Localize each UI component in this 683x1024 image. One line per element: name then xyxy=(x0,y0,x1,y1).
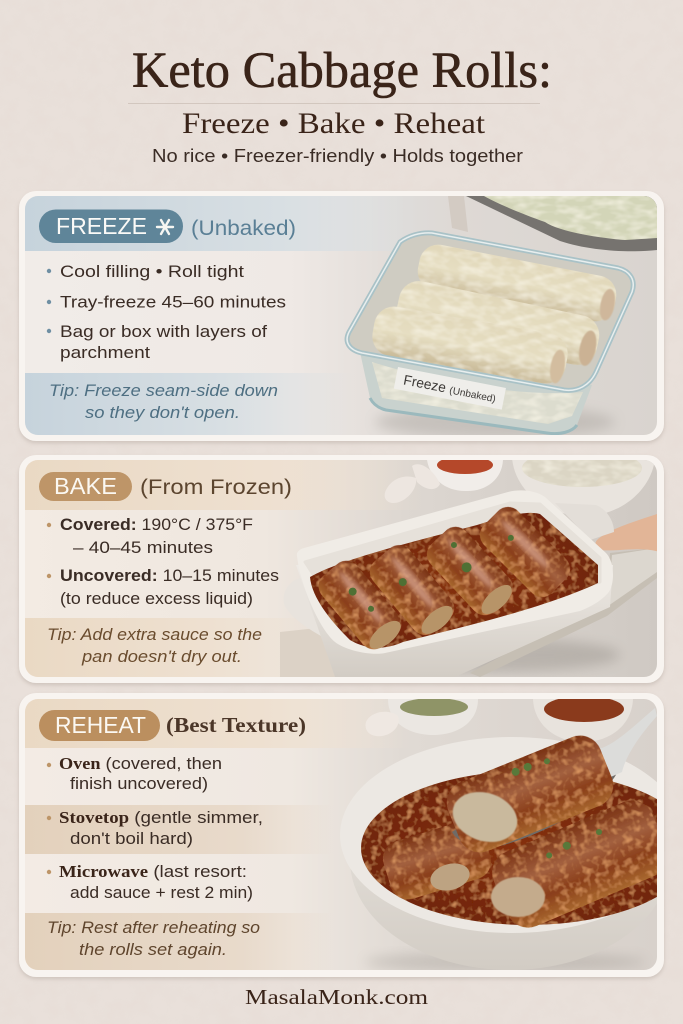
freeze tip: Tip: Freeze seam-side down xyxy=(49,381,278,400)
reheat list: Stovetop (gentle simmer, xyxy=(59,808,263,827)
reheat list: finish uncovered) xyxy=(70,774,208,793)
container label: (Unbaked) xyxy=(448,385,497,405)
container label xyxy=(394,367,506,410)
sauce xyxy=(361,771,683,925)
photo: baking dish xyxy=(280,449,660,677)
freeze tip: so they don't open. xyxy=(85,403,240,422)
dish handles xyxy=(310,628,320,636)
three cabbage rolls xyxy=(369,241,620,387)
reheat tip: the rolls set again. xyxy=(79,940,227,959)
tagline: No rice • Freezer-friendly • Holds together xyxy=(152,146,523,166)
freeze list: Tray-freeze 45–60 minutes xyxy=(60,292,286,312)
bake list: Uncovered: 10–15 minutes xyxy=(60,566,279,585)
freeze list: parchment xyxy=(60,343,150,362)
header band xyxy=(25,460,306,510)
freeze list: Cool filling • Roll tight xyxy=(60,262,244,281)
freeze qualifier: (Unbaked) xyxy=(191,217,296,240)
panel: freeze xyxy=(19,191,664,443)
photo: frozen rolls in glass container xyxy=(347,196,657,438)
freeze pill badge: FREEZE xyxy=(56,213,147,239)
tip band xyxy=(25,913,300,970)
header block xyxy=(128,43,552,166)
freeze pill badge xyxy=(39,210,183,243)
tip band xyxy=(25,618,260,677)
footer website: MasalaMonk.com xyxy=(245,985,428,1009)
reheat tip xyxy=(47,918,260,959)
icon: snowflake xyxy=(157,220,173,234)
stovetop band xyxy=(25,805,300,854)
side bowls and garlic xyxy=(365,696,633,742)
bake list: Covered: 190°C / 375°F xyxy=(60,515,253,534)
container label: Freeze xyxy=(402,371,448,395)
reheat list: add sauce + rest 2 min) xyxy=(70,883,253,902)
reheat list: Microwave (last resort: xyxy=(59,862,247,881)
bake tip: Tip: Add extra sauce so the xyxy=(47,625,262,644)
ingredient bowls xyxy=(384,460,654,514)
reheat list xyxy=(47,754,263,902)
header band xyxy=(25,196,356,251)
reheat pill badge xyxy=(39,710,160,741)
bake list: (to reduce excess liquid) xyxy=(60,589,253,608)
dish body xyxy=(296,565,613,677)
reheat tip: Tip: Rest after reheating so xyxy=(47,918,260,937)
tip band xyxy=(25,373,304,435)
spoon xyxy=(452,708,657,847)
four baked rolls xyxy=(318,506,570,650)
header band xyxy=(25,699,320,748)
bake list xyxy=(47,515,279,608)
bake list: – 40–45 minutes xyxy=(73,538,213,557)
hand and towel xyxy=(470,513,660,677)
reheat pill badge: REHEAT xyxy=(55,712,146,738)
panel: bake xyxy=(19,449,664,685)
panel: reheat xyxy=(19,693,683,979)
photo: bowl with spooned roll xyxy=(344,699,657,970)
reheat list: Oven (covered, then xyxy=(59,754,222,773)
bake tip xyxy=(47,625,262,666)
sauce xyxy=(310,513,598,648)
lower rolls xyxy=(382,800,657,928)
roll on spoon xyxy=(446,735,614,852)
bake pill badge xyxy=(39,472,132,501)
bake tip: pan doesn't dry out. xyxy=(81,647,242,666)
freeze list xyxy=(47,262,286,362)
bake pill badge: BAKE xyxy=(54,473,117,499)
reheat list: don't boil hard) xyxy=(70,829,193,848)
bowl xyxy=(351,870,590,968)
reheat qualifier: (Best Texture) xyxy=(166,713,306,737)
freeze tip xyxy=(49,381,278,422)
bake qualifier: (From Frozen) xyxy=(140,476,292,499)
title: Keto Cabbage Rolls: xyxy=(132,43,552,99)
freeze list: Bag or box with layers of xyxy=(60,322,267,341)
subtitle: Freeze • Bake • Reheat xyxy=(182,107,486,140)
